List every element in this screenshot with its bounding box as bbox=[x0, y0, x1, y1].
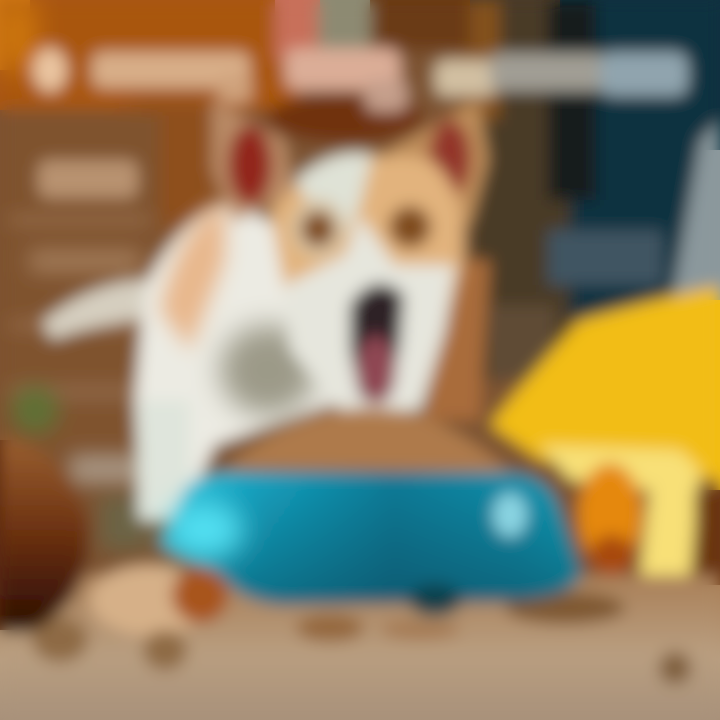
bowl: right highlight bbox=[493, 493, 527, 537]
dog: body bbox=[135, 205, 345, 500]
dog: tongue bbox=[356, 336, 396, 404]
dog: front leg bbox=[138, 400, 190, 520]
dog: open mouth bbox=[350, 284, 404, 398]
dog bbox=[42, 100, 490, 520]
dog: right ear bbox=[390, 100, 488, 225]
dog: right eye bbox=[389, 206, 431, 248]
dog paw bbox=[172, 567, 228, 623]
dog: left ear bbox=[212, 100, 292, 222]
background: top centre bowl shape and post bbox=[267, 0, 470, 142]
bowl: bottom shadow bbox=[409, 584, 461, 616]
dog: left eye bbox=[291, 199, 345, 257]
brown ball at left bbox=[0, 438, 89, 632]
dog: right neck bbox=[425, 260, 490, 420]
blue food bowl bbox=[160, 472, 582, 616]
floor bbox=[0, 565, 720, 720]
dog: head bbox=[270, 156, 463, 400]
title (illegible in reference, drawn as blurred band) bbox=[33, 48, 688, 112]
dog: forehead white blaze bbox=[295, 153, 372, 235]
dog: tail bbox=[42, 280, 150, 340]
bowl: left highlight bbox=[167, 502, 243, 558]
dog: shoulder tan patch bbox=[160, 200, 225, 350]
dog: muzzle white bbox=[285, 215, 455, 410]
kibble mound above bowl bbox=[225, 408, 510, 472]
yellow cloth / fruit at right bbox=[490, 285, 720, 585]
background: dark teal panel at right bbox=[460, 0, 720, 380]
subheading (illegible in reference, blurred band) bbox=[38, 160, 138, 198]
dog: chest shadow bbox=[220, 325, 316, 415]
